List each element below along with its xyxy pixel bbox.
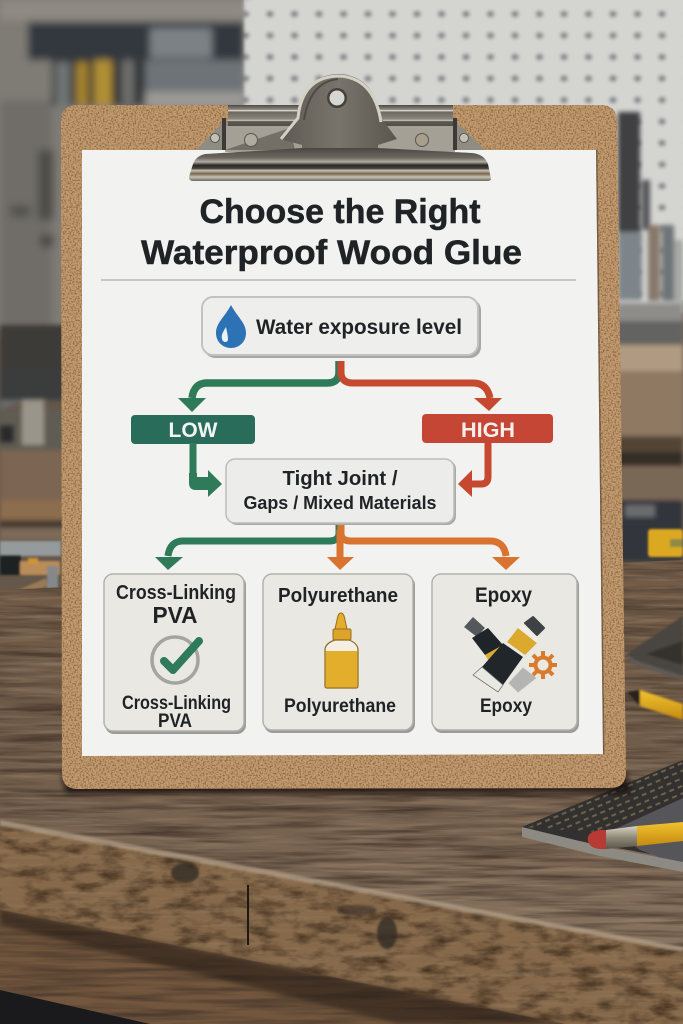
pegboard [244, 0, 683, 313]
high badge [422, 414, 553, 443]
title: Waterproof Wood Glue [141, 234, 522, 272]
icon: epoxy tubes and gear [464, 617, 557, 693]
arrow: low to middle box [189, 443, 222, 497]
icon: water drop [216, 305, 246, 348]
arrow: split to low [178, 361, 339, 412]
card: epoxy [432, 574, 579, 733]
card: epoxy: Epoxy [480, 695, 532, 717]
board shadow [62, 772, 630, 794]
wooden table front face [0, 823, 683, 1024]
back wall [0, 0, 250, 340]
card: epoxy: Epoxy [475, 584, 532, 607]
left shelf area [0, 325, 65, 540]
cork board [61, 105, 626, 789]
high badge: HIGH [461, 419, 515, 442]
clip side wings [198, 122, 228, 150]
decision box: tight joint or gaps [226, 459, 456, 525]
arrow: high to middle box [458, 443, 488, 497]
clip front jaw [189, 148, 491, 181]
card: cross-linking pva [104, 574, 246, 734]
arrow: to polyurethane [327, 530, 354, 570]
low badge: LOW [168, 419, 218, 442]
card: polyurethane: Polyurethane [278, 584, 398, 607]
icon: glue bottle [325, 613, 358, 688]
yellow tape measure [648, 529, 683, 557]
low badge [131, 415, 255, 444]
hanging tools on right [615, 112, 683, 562]
card: polyurethane: Polyurethane [284, 696, 396, 717]
metal clip [189, 74, 491, 181]
decision box: tight joint or gaps: Gaps / Mixed Materials [244, 493, 436, 513]
wooden table top [0, 560, 683, 950]
card: cross-linking pva: PVA [158, 711, 192, 732]
card: cross-linking pva: Cross-Linking [116, 581, 236, 604]
table edge highlight [0, 820, 683, 952]
table underside beam [0, 910, 565, 1024]
front tube [473, 617, 544, 692]
paper sheet [82, 150, 603, 756]
yellow pencil, right [627, 690, 683, 720]
label: water exposure level: Water exposure level [256, 316, 462, 339]
card: cross-linking pva: PVA [152, 602, 198, 628]
card: polyurethane [263, 574, 415, 733]
dark metal square, right [627, 616, 683, 680]
steel ruler [522, 760, 683, 872]
back tube [464, 617, 537, 693]
title [141, 193, 522, 272]
ruler and tools, left [0, 541, 61, 606]
arrow: split to high [341, 361, 502, 411]
clip handle [280, 74, 397, 156]
pencil with eraser [588, 822, 683, 849]
title: Choose the Right [200, 193, 480, 231]
arrow: to epoxy [341, 525, 520, 570]
card: cross-linking pva: Cross-Linking [122, 693, 231, 714]
arrow: to cross-linking pva [155, 525, 339, 570]
clip hinge bar [228, 105, 453, 128]
decision box: tight joint or gaps: Tight Joint / [282, 468, 398, 490]
gear [529, 651, 557, 679]
clipboard [61, 74, 630, 794]
icon: check mark [152, 637, 199, 683]
water exposure box [202, 297, 481, 358]
